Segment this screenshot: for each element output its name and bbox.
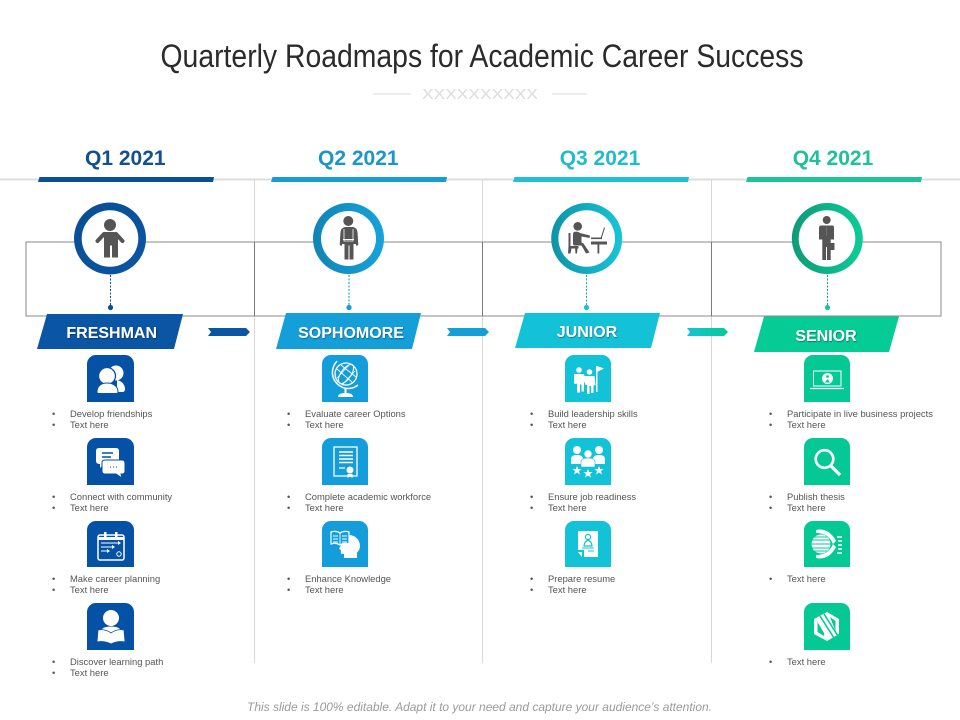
icon: leadership (565, 355, 611, 402)
text: learning path (52, 656, 163, 678)
text: item three: Text here (787, 573, 826, 584)
text: planning: • (52, 584, 55, 595)
icon: globe (322, 355, 368, 402)
text: academic workforce (287, 491, 431, 513)
heading: Q3 2021: Q3 2021 (560, 147, 641, 170)
icon: career calendar (87, 521, 134, 567)
text: community: Connect with community (70, 491, 172, 502)
icon: student with backpack (340, 216, 358, 260)
text: leadership: • (530, 408, 533, 419)
footer note: This slide is 100% editable. Adapt it to your need and capture your audience’s attention. (247, 702, 712, 714)
text: job readiness: • (530, 502, 533, 513)
icon: abstract globe (804, 521, 850, 567)
icon: job readiness team (565, 438, 611, 485)
text: resume: Prepare resume (548, 573, 615, 584)
banner: SENIOR: SENIOR (795, 328, 857, 345)
text: business projects: Text here (787, 419, 826, 430)
text: academic workforce: • (287, 491, 290, 502)
icon: magnifier (804, 438, 850, 485)
text: resume: • (530, 573, 533, 584)
text: learning path: • (52, 656, 55, 667)
connector dot (108, 275, 113, 310)
arrow (687, 328, 728, 336)
text: leadership (530, 408, 638, 430)
text: item three: • (769, 573, 772, 584)
text: learning path: Text here (70, 667, 109, 678)
text: job readiness: Text here (548, 502, 587, 513)
text: item three (769, 573, 826, 584)
text: knowledge (287, 573, 391, 595)
text: job readiness (530, 491, 636, 513)
icon: student at laptop (568, 222, 607, 254)
text: community: • (52, 502, 55, 513)
text: career options: • (287, 419, 290, 430)
text: job readiness: Ensure job readiness (548, 491, 636, 502)
text: thesis: Publish thesis (787, 491, 845, 502)
heading: Q1 2021: Q1 2021 (85, 147, 166, 170)
text: career options: Text here (305, 419, 344, 430)
icon: learning reader (87, 603, 134, 650)
milestone circle (551, 203, 622, 274)
text: knowledge: Text here (305, 584, 344, 595)
quarter bar (513, 177, 689, 182)
panel: Q2 2021 sophomore (271, 147, 489, 595)
text: resume: • (530, 584, 533, 595)
icon: businessman (819, 216, 834, 260)
text: business projects (769, 408, 933, 430)
title: Quarterly Roadmaps for Academic Career Success (160, 38, 804, 74)
quarter bar (746, 177, 922, 182)
text: job readiness: • (530, 491, 533, 502)
text: leadership: Text here (548, 419, 587, 430)
text: academic workforce: Text here (305, 502, 344, 513)
banner: JUNIOR: JUNIOR (557, 324, 618, 341)
text: academic workforce: • (287, 502, 290, 513)
milestone circle (74, 202, 146, 274)
arrow (447, 328, 489, 336)
connector dot (346, 275, 352, 310)
text: resume: Text here (548, 584, 587, 595)
text: knowledge: Enhance Knowledge (305, 573, 391, 584)
icon: community chat (87, 438, 134, 485)
text: thesis (769, 491, 845, 513)
panel: Q3 2021 junior (513, 147, 728, 595)
banner: SOPHOMORE: SOPHOMORE (298, 325, 404, 342)
text: learning path: Discover learning path (70, 656, 163, 667)
arrow (208, 328, 250, 336)
banner: JUNIOR (515, 313, 660, 348)
heading: Q2 2021: Q2 2021 (318, 147, 399, 170)
heading: Q4 2021: Q4 2021 (793, 147, 874, 170)
icon: hexagon (804, 603, 850, 650)
panel: Q1 2021 freshman (37, 147, 250, 678)
text: friendships: • (52, 408, 55, 419)
text: item four: Text here (787, 656, 826, 667)
text: community (52, 491, 172, 513)
text: community: • (52, 491, 55, 502)
icon: live laptop (804, 355, 850, 402)
quarter bar (271, 177, 447, 182)
connector dot (584, 275, 589, 310)
text: business projects: • (769, 419, 772, 430)
text: community: Text here (70, 502, 109, 513)
milestone circle (313, 203, 384, 274)
text: knowledge: • (287, 573, 290, 584)
quarter bar (38, 177, 214, 182)
icon: resume (565, 521, 611, 567)
text: career options: • (287, 408, 290, 419)
text: friendships: • (52, 419, 55, 430)
text: leadership: Build leadership skills (548, 408, 638, 419)
text: friendships: Text here (70, 419, 109, 430)
connector dot (825, 275, 830, 310)
text: academic workforce: Complete academic workforce (305, 491, 431, 502)
text: item four (769, 656, 826, 667)
text: leadership: • (530, 419, 533, 430)
text: business projects: Participate in live business projects (787, 408, 933, 419)
icon: friends (87, 355, 134, 402)
text: planning: • (52, 573, 55, 584)
icon: child (98, 219, 122, 258)
text: friendships: Develop friendships (70, 408, 153, 419)
banner: SENIOR (754, 316, 899, 352)
text: business projects: • (769, 408, 772, 419)
text: knowledge: • (287, 584, 290, 595)
text: planning: Make career planning (70, 573, 160, 584)
text: resume (530, 573, 615, 595)
text: planning: Text here (70, 584, 109, 595)
text: thesis: • (769, 491, 772, 502)
banner: SOPHOMORE (276, 313, 421, 349)
text: item four: • (769, 656, 772, 667)
timeline grid lines (0, 180, 960, 663)
banner: FRESHMAN: FRESHMAN (66, 325, 157, 342)
icon: head and book (322, 521, 368, 567)
text: friendships (52, 408, 153, 430)
banner: FRESHMAN (37, 314, 183, 349)
subtitle placeholder: XXXXXXXXXX (422, 86, 538, 103)
icon: certificate (322, 438, 368, 485)
milestone circle (792, 203, 863, 274)
text: career options (287, 408, 406, 430)
panel: Q4 2021 senior (746, 147, 933, 667)
text: planning (52, 573, 160, 595)
text: thesis: • (769, 502, 772, 513)
text: learning path: • (52, 667, 55, 678)
text: thesis: Text here (787, 502, 826, 513)
text: career options: Evaluate career Options (305, 408, 406, 419)
